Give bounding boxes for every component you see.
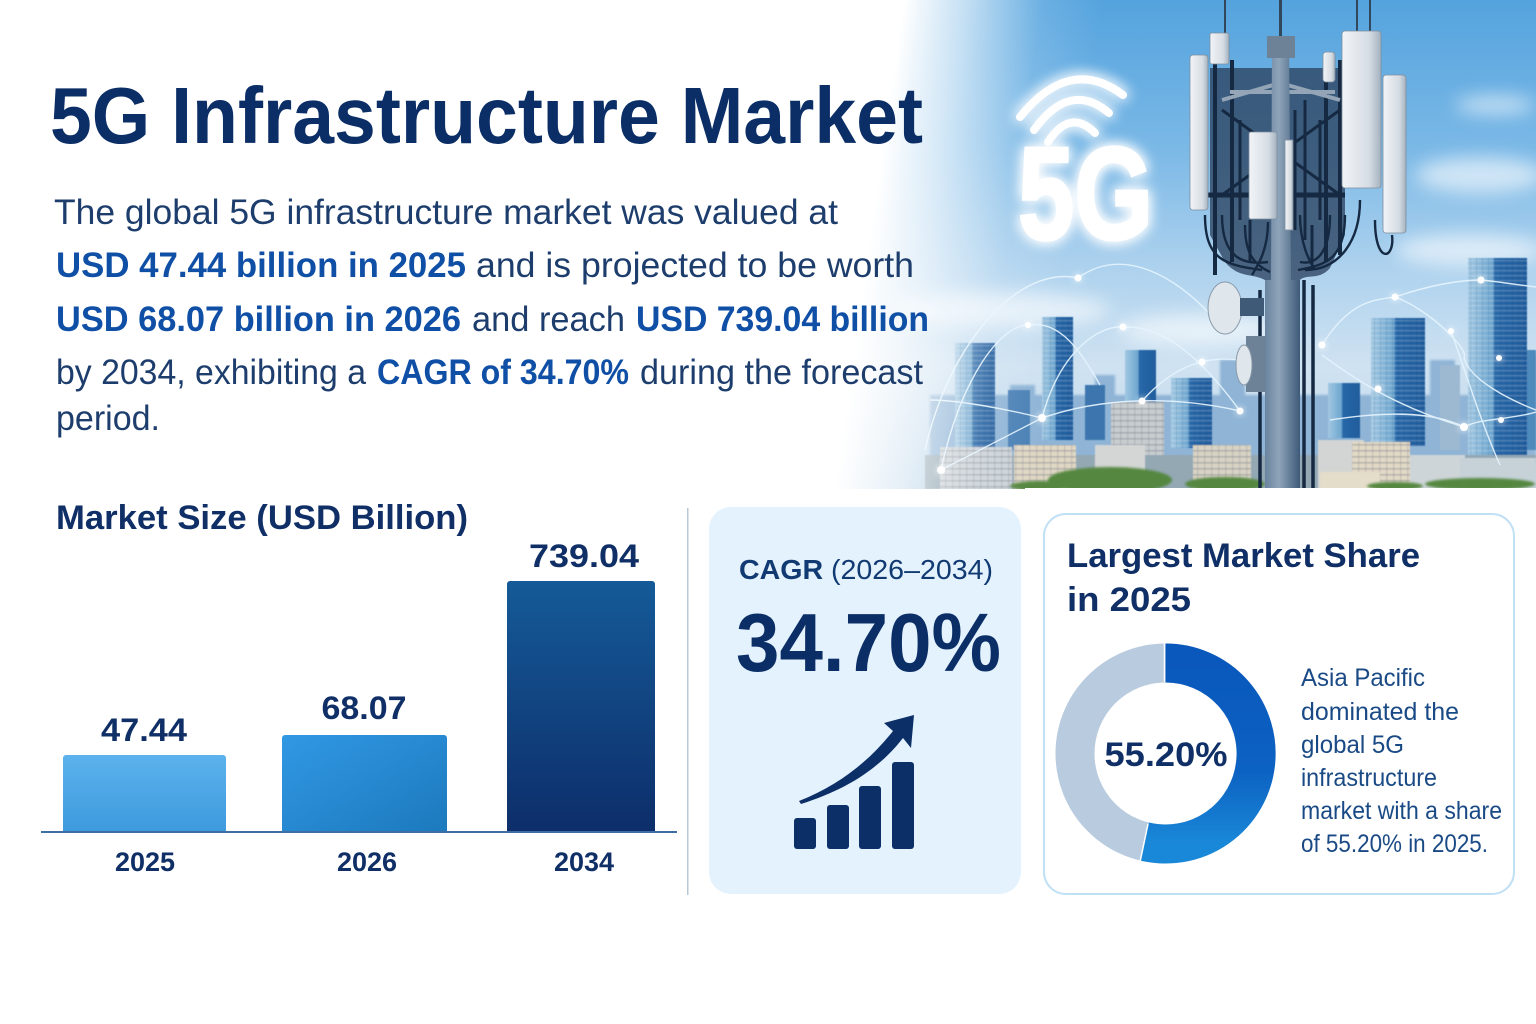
sky	[856, 0, 1536, 489]
share heading: Largest Market Share	[1067, 537, 1420, 575]
share description: dominated the	[1301, 698, 1459, 726]
clouds	[890, 96, 1536, 346]
donut chart	[1075, 643, 1256, 862]
donut value: 55.20%	[1104, 736, 1228, 774]
card background	[709, 507, 1021, 894]
vertical divider	[687, 508, 688, 895]
city skyline	[925, 258, 1536, 489]
antenna panels	[1190, 31, 1406, 233]
share description	[1301, 664, 1502, 858]
panel: market size bar chart	[41, 499, 677, 877]
tower top masts	[1224, 0, 1371, 36]
bar 2025	[63, 755, 226, 832]
share heading	[1067, 537, 1420, 619]
tower pole	[1265, 38, 1300, 489]
white strip under hero	[1025, 488, 1536, 492]
intro paragraph: during the forecast	[640, 353, 923, 392]
CAGR value: 34.70%	[736, 596, 1001, 689]
card outline	[1044, 514, 1514, 894]
title: 5G Infrastructure Market	[50, 71, 923, 160]
microwave dishes	[1208, 282, 1264, 385]
intro paragraph: and is projected to be worth	[476, 246, 914, 285]
intro paragraph: The global 5G infrastructure market was valued at	[54, 193, 838, 232]
icon: growth chart with arrow	[794, 715, 914, 849]
network arcs	[925, 264, 1536, 470]
glowing wifi icon	[1020, 79, 1123, 142]
intro paragraph: period.	[56, 399, 160, 438]
network nodes	[937, 274, 1504, 474]
distant haze skyline	[930, 355, 1536, 465]
intro paragraph: USD 47.44 billion in 2025	[56, 246, 466, 285]
CAGR label: CAGR (2026–2034)	[739, 554, 993, 585]
year labels: 2026	[337, 847, 397, 877]
share description: Asia Pacific	[1301, 664, 1425, 692]
tower frame and cables	[1205, 55, 1392, 280]
share description: infrastructure	[1301, 764, 1437, 792]
panel: largest market share	[1044, 514, 1514, 894]
share description: of 55.20% in 2025.	[1301, 830, 1488, 858]
share description: global 5G	[1301, 731, 1404, 759]
cell tower	[1190, 0, 1406, 489]
axis line	[41, 831, 677, 833]
chart heading: Market Size (USD Billion)	[56, 499, 468, 537]
pole fittings	[1246, 36, 1295, 392]
intro paragraph: CAGR of 34.70%	[377, 353, 629, 392]
intro paragraph: USD 739.04 billion	[636, 300, 929, 339]
share description: market with a share	[1301, 797, 1502, 825]
intro paragraph: USD 68.07 billion in 2026	[56, 300, 461, 339]
bar values: 739.04	[529, 538, 639, 574]
panel: CAGR	[709, 507, 1021, 894]
intro paragraph: by 2034, exhibiting a	[56, 353, 367, 392]
tower frame mass	[1210, 68, 1345, 282]
bar 2034	[507, 581, 655, 832]
intro paragraph	[54, 193, 929, 438]
glowing 5G label: 5G	[1018, 120, 1153, 267]
intro paragraph: and reach	[472, 300, 625, 339]
year labels	[115, 847, 614, 877]
hero photo: 5G tower over city skyline	[856, 0, 1536, 489]
bar values	[101, 538, 639, 748]
year labels: 2025	[115, 847, 175, 877]
platform struts	[1222, 83, 1340, 100]
share heading: in 2025	[1067, 581, 1191, 619]
bar 2026	[282, 735, 447, 832]
year labels: 2034	[554, 847, 614, 877]
trees	[1010, 467, 1535, 493]
bar values: 47.44	[101, 712, 187, 748]
bar values: 68.07	[322, 690, 406, 726]
